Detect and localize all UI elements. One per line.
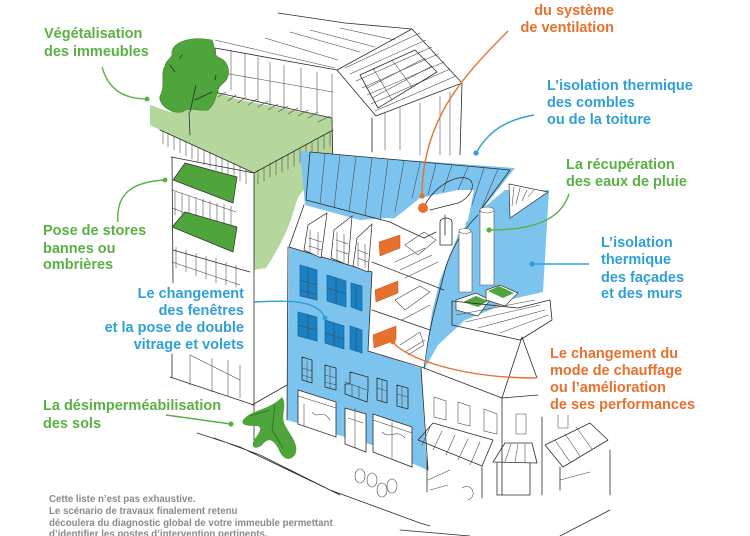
icon: orange radiators xyxy=(373,235,400,348)
label: système de ventilation: de ventilation xyxy=(521,20,614,36)
footnote: découlera du diagnostic global de votre immeuble permettant xyxy=(49,518,333,529)
label: récupération des eaux de pluie: des eaux de pluie xyxy=(566,174,687,190)
label: isolation des façades: et des murs xyxy=(601,286,682,302)
blue windows xyxy=(298,265,362,353)
label: changement des fenêtres: Le changement xyxy=(138,286,244,302)
leader: façades xyxy=(529,261,589,267)
leader: stores xyxy=(118,178,167,222)
label: isolation des façades: thermique xyxy=(601,252,671,268)
label: pose de stores: bannes ou xyxy=(43,241,116,257)
panel: green roof and light green wall xyxy=(150,92,334,440)
label: isolation des combles: L’isolation thermique xyxy=(547,78,693,94)
label: changement des fenêtres: et la pose de double xyxy=(105,320,244,336)
leader: désimperméabilisation xyxy=(166,415,234,427)
chimneys and roof planters xyxy=(456,184,548,316)
label: isolation des façades: L’isolation xyxy=(601,235,673,251)
label: changement du chauffage: Le changement du xyxy=(550,346,678,362)
label: changement du chauffage: mode de chauffage xyxy=(550,363,682,379)
label: changement des fenêtres: vitrage et volets xyxy=(134,337,244,353)
label: isolation des combles: ou de la toiture xyxy=(547,112,651,128)
leader: chauffage xyxy=(391,340,536,378)
icon: ground patch of green xyxy=(242,397,296,459)
dormer windows xyxy=(304,213,372,272)
footnote: Le scénario de travaux finalement retenu xyxy=(49,506,238,517)
footnote: Cette liste n’est pas exhaustive. xyxy=(49,494,196,505)
panel: blue facades xyxy=(287,190,549,470)
label: désimperméabilisation des sols: La désimperméabilisation xyxy=(43,398,221,414)
label: désimperméabilisation des sols: des sols xyxy=(43,416,101,432)
icon: tree on the roof xyxy=(160,39,229,135)
leader: végétalisation xyxy=(102,67,149,101)
leader: récupération xyxy=(486,194,569,233)
label: isolation des combles: des combles xyxy=(547,95,635,111)
label: changement du chauffage: ou l’amélioration xyxy=(550,380,666,396)
label: pose de stores: Pose de stores xyxy=(43,223,146,239)
leader: combles xyxy=(473,115,534,156)
left building with awnings xyxy=(170,157,287,405)
back building with gabled roof xyxy=(215,13,462,155)
label: changement du chauffage: de ses performances xyxy=(550,397,695,413)
label: système de ventilation: du système xyxy=(534,3,614,19)
leader: fenêtres xyxy=(254,301,327,320)
lower facade windows and shops xyxy=(298,357,412,467)
panel: interior cutaway with rooms xyxy=(368,178,474,368)
street and bicycles xyxy=(197,433,610,536)
label: isolation des façades: des façades xyxy=(601,270,684,286)
label: végétalisation des immeubles: des immeubles xyxy=(44,44,149,60)
panel: blue roof xyxy=(300,151,515,238)
icon: green awnings xyxy=(172,163,237,252)
label: changement des fenêtres: des fenêtres xyxy=(159,303,244,319)
corner cafe building xyxy=(418,300,610,500)
label: récupération des eaux de pluie: La récupération xyxy=(566,157,675,173)
leader: ventilation xyxy=(418,31,508,213)
label: végétalisation des immeubles: Végétalisation xyxy=(44,26,142,42)
label: pose de stores: ombrières xyxy=(43,257,113,273)
